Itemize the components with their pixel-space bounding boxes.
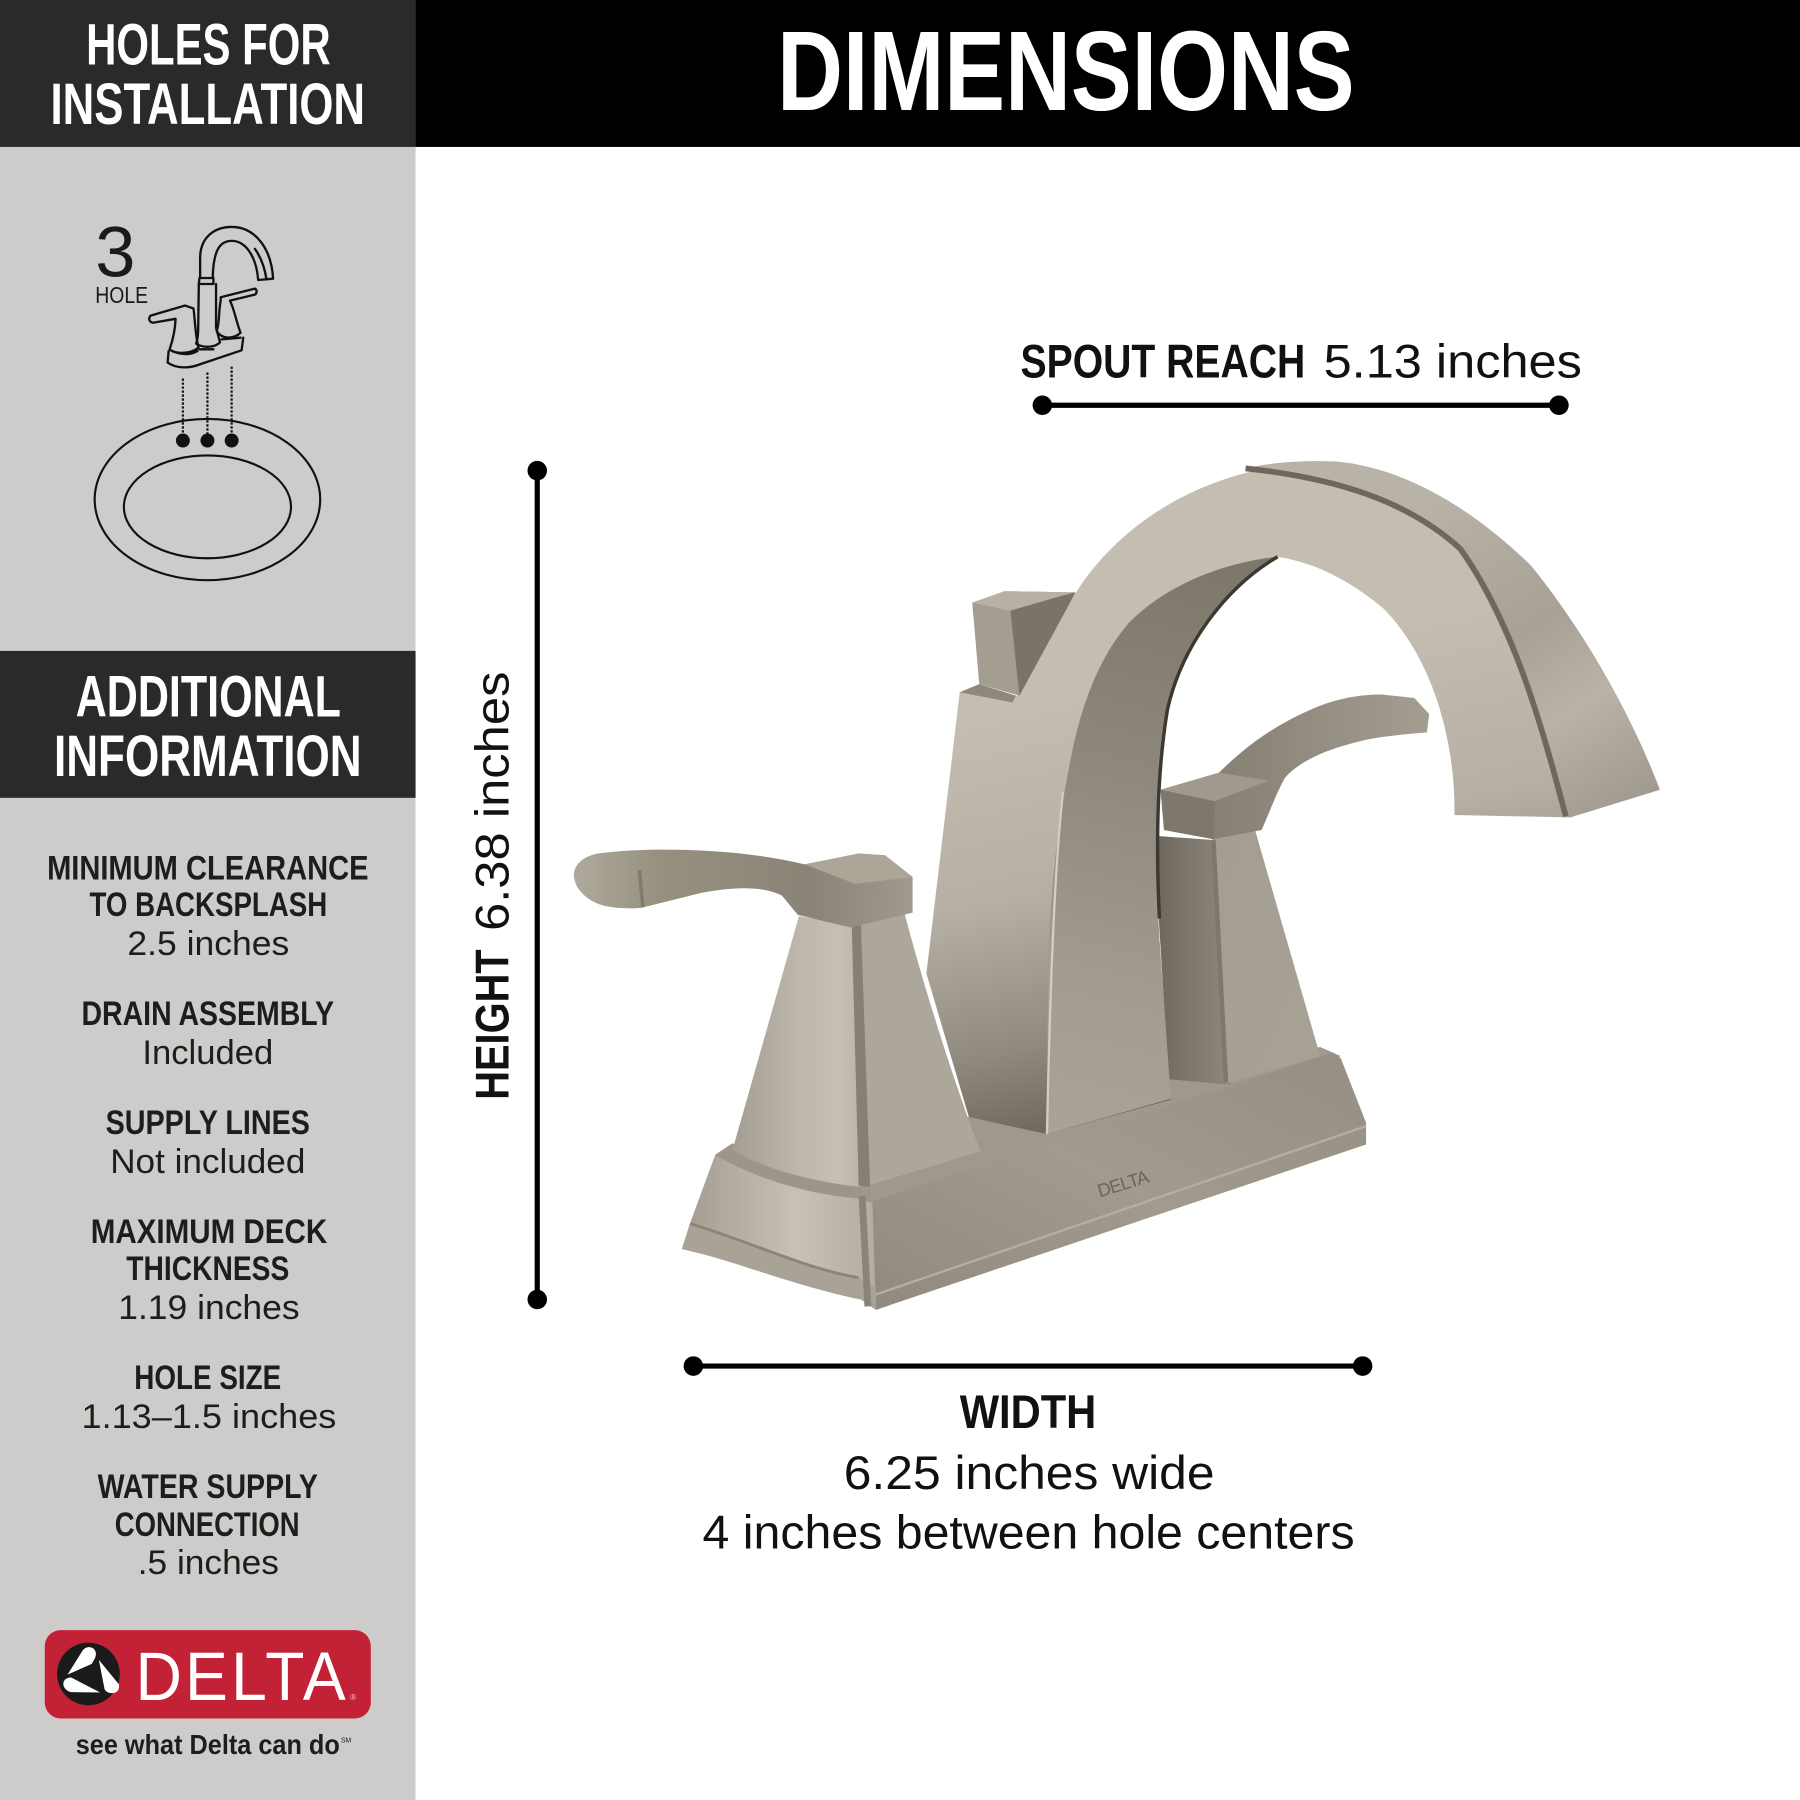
spec list	[47, 849, 368, 1582]
spec: supply lines: SUPPLY LINES	[106, 1104, 310, 1142]
spec: maximum deck thickness: 1.19 inches	[118, 1289, 300, 1327]
spec: water supply connection	[98, 1468, 318, 1582]
spout body and arch	[926, 461, 1660, 1134]
faucet brand mark: DELTA	[1095, 1165, 1152, 1201]
spec: maximum deck thickness: MAXIMUM DECK	[91, 1213, 327, 1251]
header: holes for installation: HOLES FOR	[86, 12, 331, 77]
spec: drain assembly: Included	[142, 1034, 273, 1072]
spec: water supply connection: CONNECTION	[115, 1506, 300, 1544]
spec: supply lines: Not included	[110, 1143, 305, 1181]
header: additional information	[0, 651, 416, 798]
icon: three-hole faucet and sink: HOLE	[95, 282, 148, 308]
spec: minimum clearance	[47, 849, 368, 963]
spec: water supply connection: WATER SUPPLY	[98, 1468, 318, 1506]
spec: maximum deck thickness	[91, 1213, 327, 1327]
label: height: 6.38 inches	[466, 672, 519, 931]
spec: drain assembly: DRAIN ASSEMBLY	[82, 995, 334, 1033]
label: spout reach	[1021, 335, 1582, 388]
dimension line: width	[684, 1356, 1372, 1376]
spec: supply lines	[106, 1104, 310, 1181]
title banner: dimensions	[416, 0, 1800, 147]
label: spout reach: SPOUT REACH	[1021, 335, 1305, 388]
base plate	[682, 1047, 1366, 1310]
spec: minimum clearance: MINIMUM CLEARANCE	[47, 849, 368, 887]
logo: Delta: ®	[350, 1693, 356, 1702]
spec: hole size: HOLE SIZE	[134, 1359, 281, 1397]
top knob	[960, 591, 1076, 703]
right handle body	[1154, 829, 1320, 1085]
label: spout reach: 5.13 inches	[1324, 335, 1582, 388]
spec: maximum deck thickness: THICKNESS	[126, 1250, 289, 1288]
header: additional information: INFORMATION	[54, 724, 362, 789]
logo: Delta: DELTA	[135, 1638, 349, 1715]
logo: Delta: see what Delta can do	[76, 1729, 340, 1760]
title banner: dimensions: DIMENSIONS	[777, 8, 1355, 135]
spec: hole size	[82, 1359, 336, 1436]
logo: Delta: SM	[341, 1738, 352, 1745]
spec: hole size: 1.13–1.5 inches	[82, 1398, 336, 1436]
left handle lever	[574, 850, 913, 928]
header: holes for installation: INSTALLATION	[51, 72, 365, 137]
label: height	[466, 672, 519, 1100]
spec: minimum clearance: TO BACKSPLASH	[90, 886, 327, 924]
icon: three-hole faucet and sink: 3	[95, 214, 135, 293]
dimension line: spout reach	[1033, 395, 1569, 415]
label: width	[703, 1385, 1355, 1559]
header: holes for installation	[0, 0, 416, 147]
dimension line: height	[527, 461, 547, 1309]
right handle lever	[1161, 695, 1429, 839]
product photo: faucet	[574, 461, 1660, 1310]
label: width: 6.25 inches wide	[844, 1446, 1215, 1499]
spec: water supply connection: .5 inches	[138, 1544, 279, 1582]
label: width: 4 inches between hole centers	[703, 1506, 1355, 1559]
icon: three-hole faucet and sink	[95, 214, 320, 580]
sidebar panel	[0, 0, 416, 1800]
header: additional information: ADDITIONAL	[76, 664, 341, 729]
label: width: WIDTH	[960, 1385, 1096, 1438]
spec: drain assembly	[82, 995, 334, 1072]
label: height: HEIGHT	[466, 949, 519, 1100]
spec: minimum clearance: 2.5 inches	[127, 925, 289, 963]
logo: Delta	[45, 1630, 371, 1760]
left handle body	[732, 914, 980, 1187]
